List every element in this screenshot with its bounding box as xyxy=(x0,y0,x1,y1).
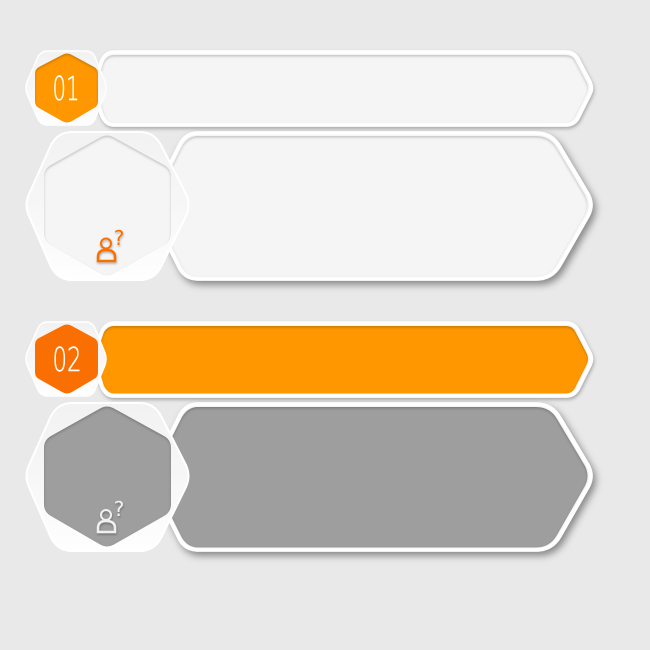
outer large hexagon 01 xyxy=(26,132,188,280)
outer large hexagon 02 xyxy=(26,403,188,551)
panel: section 02 xyxy=(26,322,592,551)
icon: person with question mark 01: ? xyxy=(114,226,124,250)
outer small hexagon 01 xyxy=(26,51,106,125)
detail bar 02 xyxy=(168,404,591,550)
header bar 02 xyxy=(98,323,592,396)
icon: person with question mark 02 xyxy=(98,497,124,532)
number badge 02 xyxy=(35,324,98,394)
header bar 01 xyxy=(98,52,592,125)
icon: person with question mark 02: ? xyxy=(114,497,124,521)
number badge 01 xyxy=(35,54,98,122)
icon: person with question mark 01 xyxy=(98,226,124,261)
detail bar 01 xyxy=(168,133,591,279)
inner large hexagon 02 xyxy=(44,406,171,546)
outer small hexagon 02 xyxy=(26,322,106,396)
number 01: 01 xyxy=(52,69,80,108)
number 02: 02 xyxy=(52,340,82,379)
inner large hexagon 01 xyxy=(44,136,171,276)
panel: section 01 xyxy=(26,51,592,280)
